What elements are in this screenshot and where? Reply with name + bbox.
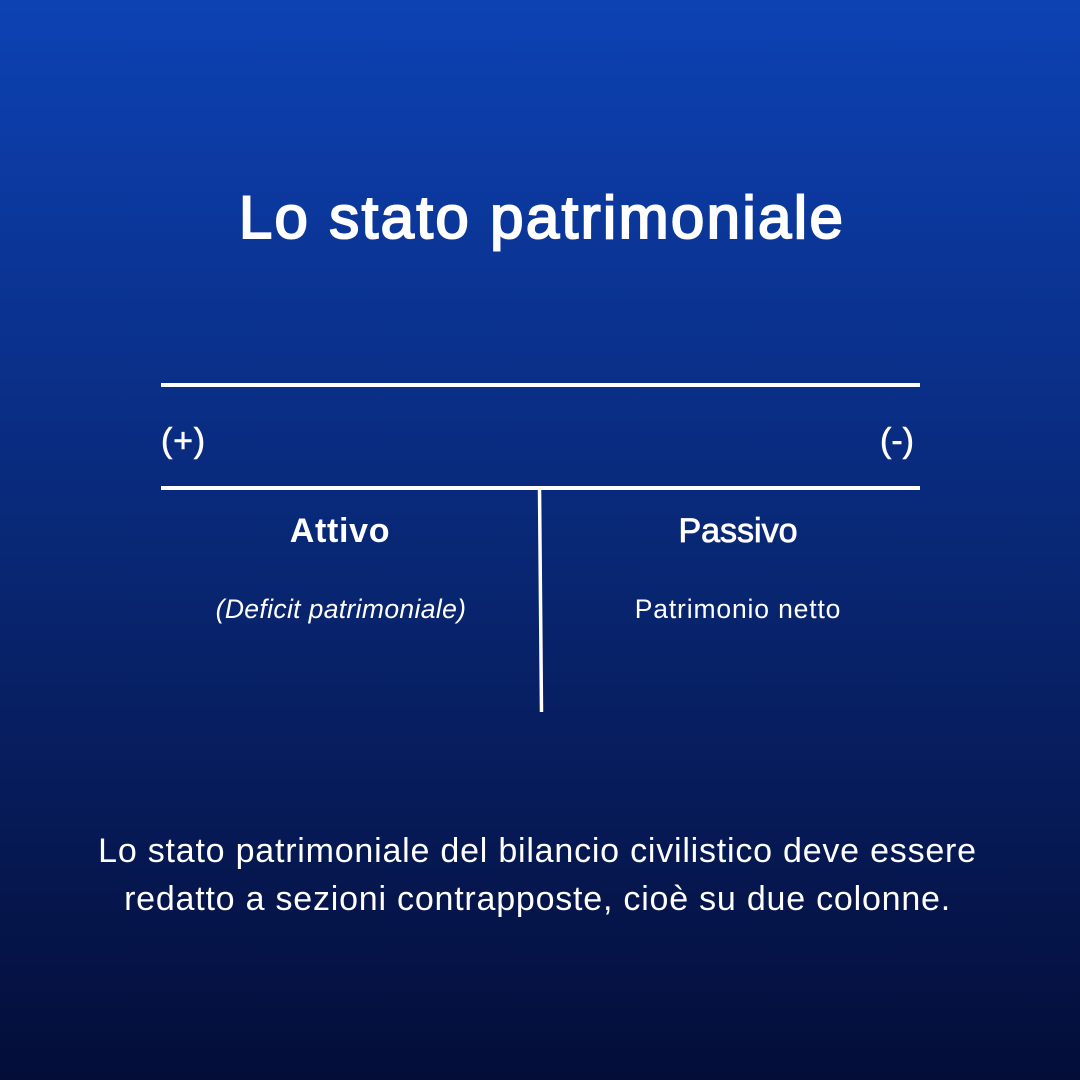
column divider bbox=[538, 490, 544, 712]
Passivo item: Patrimonio netto bbox=[635, 594, 841, 624]
Attivo heading: Attivo bbox=[290, 512, 390, 550]
Attivo item: (Deficit patrimoniale) bbox=[216, 594, 466, 624]
description text bbox=[98, 832, 977, 918]
balance sheet T-table bbox=[161, 383, 920, 712]
plus sign label: (+) bbox=[161, 422, 206, 460]
description text: Lo stato patrimoniale del bilancio civilistico deve essere bbox=[98, 832, 977, 870]
minus sign label: (-) bbox=[880, 422, 914, 460]
header rule bbox=[161, 486, 920, 490]
title: Lo stato patrimoniale bbox=[239, 184, 845, 251]
Passivo heading: Passivo bbox=[678, 512, 798, 550]
top rule bbox=[161, 383, 920, 387]
description text: redatto a sezioni contrapposte, cioè su due colonne. bbox=[124, 880, 951, 918]
